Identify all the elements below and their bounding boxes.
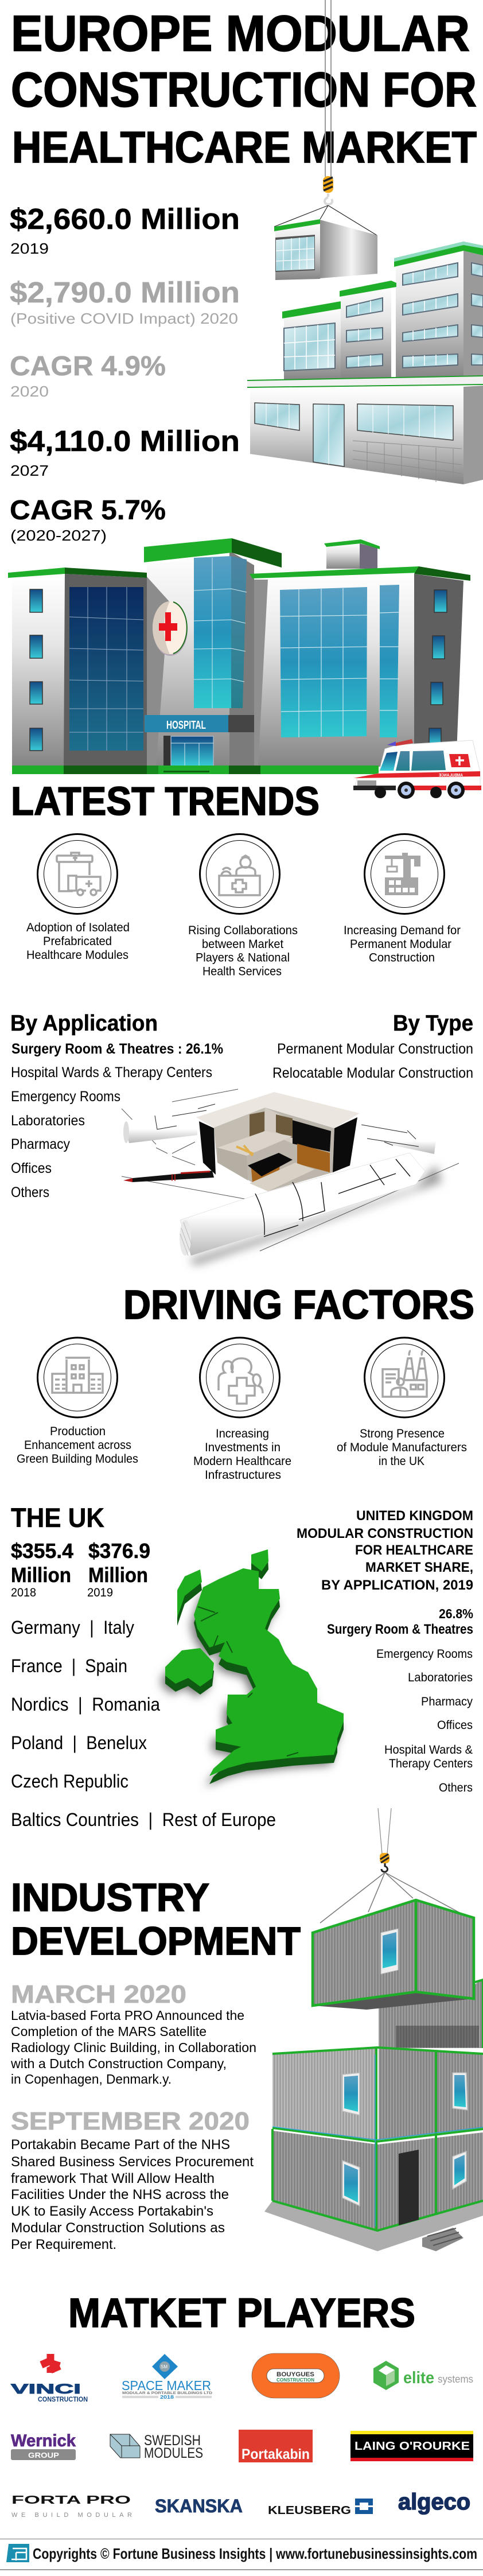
label: Production xyxy=(50,1425,106,1438)
logo: Space Maker xyxy=(122,2354,212,2400)
illustration: stacked shipping-container modules xyxy=(264,1808,483,2251)
driving factor 1: icon and label: Enhancement across xyxy=(24,1439,131,1452)
panel: the UK: $355.4 xyxy=(11,1539,73,1563)
country list: Baltics Countries | Rest of Europe xyxy=(11,1809,276,1830)
icon: crane and building xyxy=(385,853,420,895)
illustration: modular house on blueprints xyxy=(122,1089,459,1265)
chart title: UK market share by application: MODULAR CONSTRUCTION xyxy=(297,1526,473,1541)
icon: people with medical cross xyxy=(219,1358,263,1404)
development: March 2020: Latvia-based Forta PRO Announced the xyxy=(11,2008,244,2023)
map shadow xyxy=(162,1579,340,1786)
hospital left block xyxy=(8,568,147,767)
UK application share list: 26.8% xyxy=(439,1606,473,1621)
segment: by type xyxy=(272,1011,473,1081)
trend 3: icon and label xyxy=(344,834,461,964)
UK application share list: Pharmacy xyxy=(421,1695,473,1708)
development: September 2020: framework That Will Allow Health xyxy=(11,2171,215,2186)
re-draw cables over title xyxy=(325,0,332,177)
logo: Wernick Group: GROUP xyxy=(28,2451,59,2460)
title: EUROPE MODULAR xyxy=(11,5,470,62)
logo: Forta Pro xyxy=(11,2494,132,2519)
panel: the UK: 2018 xyxy=(11,1586,36,1599)
trend 2: icon and label: between Market xyxy=(202,938,283,951)
mirrored ambulance text: AMBULANCE xyxy=(439,774,463,778)
logo: Algeco: algeco xyxy=(398,2489,470,2515)
country list xyxy=(11,1617,276,1830)
development: March 2020: with a Dutch Construction Company, xyxy=(10,2056,227,2071)
segment: by type: Relocatable Modular Construction xyxy=(272,1065,473,1081)
development: September 2020 xyxy=(11,2107,254,2252)
segment: by type: By Type xyxy=(393,1011,473,1036)
driving factor 3: icon and label xyxy=(337,1338,467,1468)
market statistics: CAGR 5.7% xyxy=(10,495,166,526)
segment: by application: Hospital Wards & Therapy Centers xyxy=(11,1064,212,1081)
label: Increasing Demand for xyxy=(344,924,461,937)
chart title: UK market share by application xyxy=(297,1508,473,1593)
market statistics: 2027 xyxy=(10,462,49,479)
panel: the UK: THE UK xyxy=(11,1502,104,1533)
driving factor 2: icon and label xyxy=(193,1338,291,1482)
market statistics: 2020 xyxy=(10,383,49,400)
heading: industry development: INDUSTRY xyxy=(11,1875,209,1920)
country list: France | Spain xyxy=(11,1656,127,1676)
map surface xyxy=(165,1549,344,1776)
hospital centre block xyxy=(144,538,282,767)
heading: industry development xyxy=(11,1875,301,1963)
market statistics: CAGR 4.9% xyxy=(10,351,166,382)
crane rigging xyxy=(320,1808,462,1923)
market statistics: (2020-2027) xyxy=(10,527,107,544)
trend 2: icon and label: Health Services xyxy=(202,965,282,978)
development: March 2020: MARCH 2020 xyxy=(11,1980,186,2008)
segment: by application: Others xyxy=(11,1184,49,1200)
blueprint roll: left xyxy=(123,1104,215,1143)
UK application share list: Hospital Wards & xyxy=(384,1743,473,1757)
title xyxy=(11,5,477,172)
trend 3: icon and label: Construction xyxy=(369,951,435,964)
hospital green base xyxy=(12,766,379,774)
panel: the UK: $376.9 xyxy=(88,1539,150,1563)
driving factor 2: icon and label: Investments in xyxy=(205,1441,281,1454)
logo: Portakabin: Portakabin xyxy=(242,2446,310,2462)
segment: by application xyxy=(10,1011,223,1200)
heading: industry development: DEVELOPMENT xyxy=(11,1919,301,1963)
logo: Skanska: SKANSKA xyxy=(155,2496,243,2516)
development: September 2020: SEPTEMBER 2020 xyxy=(11,2107,250,2135)
back container xyxy=(379,1980,483,2048)
logo: Vinci Construction: VINCI xyxy=(11,2381,81,2397)
hospital chimney xyxy=(324,539,380,569)
icon: reception desk with nurse xyxy=(219,856,260,895)
market statistics: $4,110.0 Million xyxy=(10,425,240,457)
trend 2: icon and label: Players & National xyxy=(196,951,290,964)
logo: Bouygues Construction: BOUYGUES xyxy=(276,2371,314,2378)
market statistics: $2,790.0 Million xyxy=(10,276,240,309)
logo: Swedish Modules: SWEDISH xyxy=(144,2433,201,2449)
driving factor 3: icon and label: of Module Manufacturers xyxy=(337,1441,467,1454)
development: September 2020: Portakabin Became Part of the NHS xyxy=(11,2137,230,2153)
driving factor 2: icon and label: Modern Healthcare xyxy=(193,1455,291,1468)
map extrusion xyxy=(165,1557,344,1784)
panel: the UK xyxy=(11,1502,150,1599)
logo: Vinci Construction xyxy=(11,2354,88,2403)
logo: Kleusberg: KLEUSBERG xyxy=(268,2504,351,2517)
segment: by application: By Application xyxy=(10,1011,158,1036)
logo: Forta Pro: WE BUILD MODULAR xyxy=(11,2512,132,2519)
development: September 2020: Shared Business Services Procurement xyxy=(11,2154,254,2170)
UK application share list xyxy=(327,1606,473,1794)
trend 2: icon and label xyxy=(188,834,298,978)
footer xyxy=(0,2539,483,2570)
market statistics: $2,660.0 Million xyxy=(10,203,240,235)
chart title: UK market share by application: UNITED KINGDOM xyxy=(356,1508,473,1524)
trend 3: icon and label: Permanent Modular xyxy=(350,938,451,951)
chart title: UK market share by application: FOR HEALTHCARE xyxy=(355,1543,473,1558)
label: Rising Collaborations xyxy=(188,924,298,937)
logo: Kleusberg xyxy=(268,2499,373,2517)
UK application share list: Others xyxy=(439,1781,473,1794)
red cross sign xyxy=(159,612,177,641)
panel: the UK: 2019 xyxy=(87,1586,113,1599)
trend 1: icon and label: Prefabricated xyxy=(43,935,112,948)
chart title: UK market share by application: BY APPLICATION, 2019 xyxy=(321,1578,473,1593)
logo: Swedish Modules: MODULES xyxy=(144,2445,203,2461)
illustration: modular building xyxy=(247,242,483,484)
driving factor 1: icon and label: Green Building Modules xyxy=(17,1452,138,1466)
logo: Wernick Group: Wernick xyxy=(11,2431,76,2450)
market statistics: 2019 xyxy=(10,240,49,257)
market statistics xyxy=(10,203,240,544)
logo: Elite Systems: elite xyxy=(403,2369,434,2387)
icon: factory and manager xyxy=(383,1350,427,1397)
logo: Swedish Modules xyxy=(110,2433,203,2461)
development: March 2020 xyxy=(10,1980,256,2087)
logo: Elite Systems xyxy=(373,2361,473,2390)
UK application share list: Emergency Rooms xyxy=(376,1648,473,1661)
logo: Laing O'Rourke: LAING O'ROURKE xyxy=(355,2440,470,2453)
logo: Bouygues Construction xyxy=(252,2353,340,2398)
logo: Space Maker: MODULAR & PORTABLE BUILDINGS LTD xyxy=(122,2391,212,2395)
illustration: hospital xyxy=(8,538,470,774)
segment: by application: Surgery Room & Theatres : 26.1% xyxy=(11,1041,223,1057)
logo: Portakabin xyxy=(239,2430,313,2462)
UK application share list: Therapy Centers xyxy=(389,1757,473,1770)
logo: Forta Pro: FORTA PRO xyxy=(11,2494,131,2507)
country list: Czech Republic xyxy=(11,1771,128,1792)
blueprint roll: large front xyxy=(180,1153,425,1256)
hospital right block xyxy=(250,566,470,767)
crane cable and hook xyxy=(323,0,333,204)
logo: Space Maker: SPACE MAKER xyxy=(122,2378,211,2393)
logo: Wernick Group xyxy=(11,2431,76,2460)
hanging container xyxy=(313,1900,474,2010)
development: March 2020: Completion of the MARS Satellite xyxy=(11,2024,207,2039)
icon: green building xyxy=(52,1358,103,1393)
icon: isolated module with ambulance xyxy=(57,853,100,895)
segment: by application: Pharmacy xyxy=(11,1136,70,1152)
country list: Nordics | Romania xyxy=(11,1694,160,1715)
market statistics: (Positive COVID Impact) 2020 xyxy=(10,310,238,327)
segment: by type: Permanent Modular Construction xyxy=(277,1041,473,1057)
logo: Vinci Construction: CONSTRUCTION xyxy=(38,2396,88,2403)
map: United Kingdom xyxy=(162,1549,344,1786)
logo: Elite Systems: systems xyxy=(438,2373,473,2385)
logo: Space Maker: SM xyxy=(161,2364,168,2369)
panel: the UK: Million xyxy=(88,1563,148,1587)
illustration: modular unit being lifted xyxy=(274,205,377,280)
label: Increasing xyxy=(216,1427,269,1440)
UK application share list: Laboratories xyxy=(408,1671,473,1684)
heading: latest trends: LATEST TRENDS xyxy=(11,779,320,823)
panel: the UK: Million xyxy=(11,1563,71,1587)
label: Strong Presence xyxy=(360,1427,445,1440)
trend 1: icon and label: Healthcare Modules xyxy=(26,949,128,962)
chart title: UK market share by application: MARKET SHARE, xyxy=(365,1560,473,1575)
trend 1: icon and label xyxy=(26,834,130,962)
hospital sign text: HOSPITAL xyxy=(166,719,206,732)
blueprint roll: right xyxy=(359,1121,438,1154)
development: September 2020: Per Requirement. xyxy=(11,2237,116,2252)
icon: Fortune Business Insights logo xyxy=(6,2544,29,2562)
country list: Poland | Benelux xyxy=(11,1732,147,1753)
development: March 2020: Radiology Clinic Building, in Collaboration xyxy=(11,2040,256,2055)
segment: by application: Emergency Rooms xyxy=(11,1089,120,1105)
driving factor 2: icon and label: Infrastructures xyxy=(205,1468,281,1482)
logo: Bouygues Construction: CONSTRUCTION xyxy=(276,2377,314,2383)
segment: by application: Laboratories xyxy=(11,1113,85,1129)
logo: Laing O'Rourke xyxy=(350,2431,473,2461)
driving factor 3: icon and label: in the UK xyxy=(379,1455,424,1468)
illustration: ambulance xyxy=(353,739,481,799)
pen xyxy=(123,1171,214,1182)
UK application share list: Offices xyxy=(437,1719,473,1732)
segment: by application: Offices xyxy=(11,1160,52,1176)
heading: market players: MATKET PLAYERS xyxy=(68,2291,415,2336)
label: Adoption of Isolated xyxy=(26,921,130,934)
country list: Germany | Italy xyxy=(11,1617,134,1638)
lower container stack xyxy=(264,2047,483,2251)
modular house xyxy=(196,1092,360,1191)
development: September 2020: UK to Easily Access Portakabin's xyxy=(11,2204,213,2219)
logo: Space Maker: 2018 xyxy=(160,2394,174,2400)
driving factor 1: icon and label xyxy=(17,1338,138,1466)
tower windows xyxy=(284,263,483,371)
development: March 2020: in Copenhagen, Denmark.y. xyxy=(11,2072,172,2087)
development: September 2020: Modular Construction Solutions as xyxy=(11,2220,225,2236)
development: September 2020: Facilities Under the NHS across the xyxy=(11,2187,229,2202)
